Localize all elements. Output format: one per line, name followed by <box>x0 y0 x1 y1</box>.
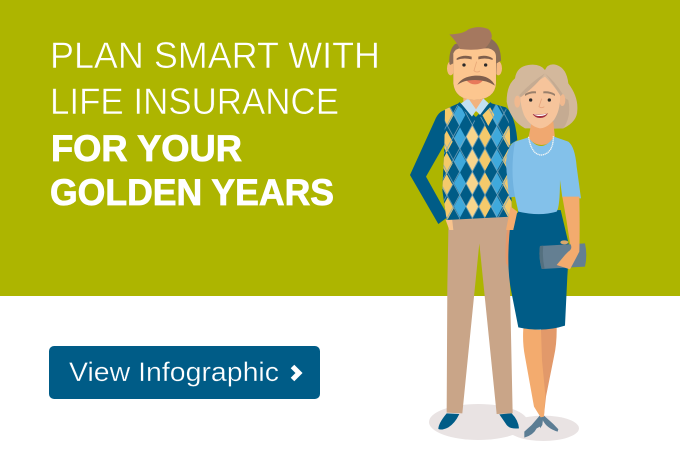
clutch bag <box>539 240 586 269</box>
woman back thigh <box>505 213 510 270</box>
ground shadows <box>429 404 579 441</box>
woman skirt <box>508 210 569 330</box>
woman left arm <box>506 207 517 230</box>
woman forearm and hand <box>557 197 580 269</box>
man left arm <box>410 110 448 224</box>
pearl necklace <box>529 137 553 155</box>
title: GOLDEN YEARS <box>50 172 334 213</box>
man neck <box>463 92 483 112</box>
man trousers <box>447 215 513 414</box>
button: view infographic <box>49 346 320 399</box>
title: PLAN SMART WITH <box>50 35 380 76</box>
woman skirt top <box>513 210 565 230</box>
icon: chevron <box>292 366 299 380</box>
woman legs <box>523 327 557 417</box>
green banner background <box>0 0 680 296</box>
vest neck band <box>458 103 492 119</box>
button: view infographic: View Infographic <box>69 357 279 387</box>
upper bodies <box>410 27 581 230</box>
couple illustration <box>410 27 586 441</box>
man head <box>447 27 502 100</box>
man right sleeve <box>506 107 517 147</box>
lower bodies <box>429 210 579 441</box>
shirt collar <box>461 98 489 117</box>
man hand <box>446 215 453 230</box>
argyle vest <box>442 104 512 220</box>
clutch and hand <box>539 197 586 269</box>
title: FOR YOUR <box>51 128 242 169</box>
woman shoes <box>524 413 558 438</box>
woman hair back <box>507 64 577 128</box>
woman neck <box>528 122 555 145</box>
woman blouse <box>506 137 581 214</box>
title <box>50 35 380 213</box>
man shoes <box>438 413 519 430</box>
woman head <box>514 73 565 128</box>
title: LIFE INSURANCE <box>50 81 339 122</box>
